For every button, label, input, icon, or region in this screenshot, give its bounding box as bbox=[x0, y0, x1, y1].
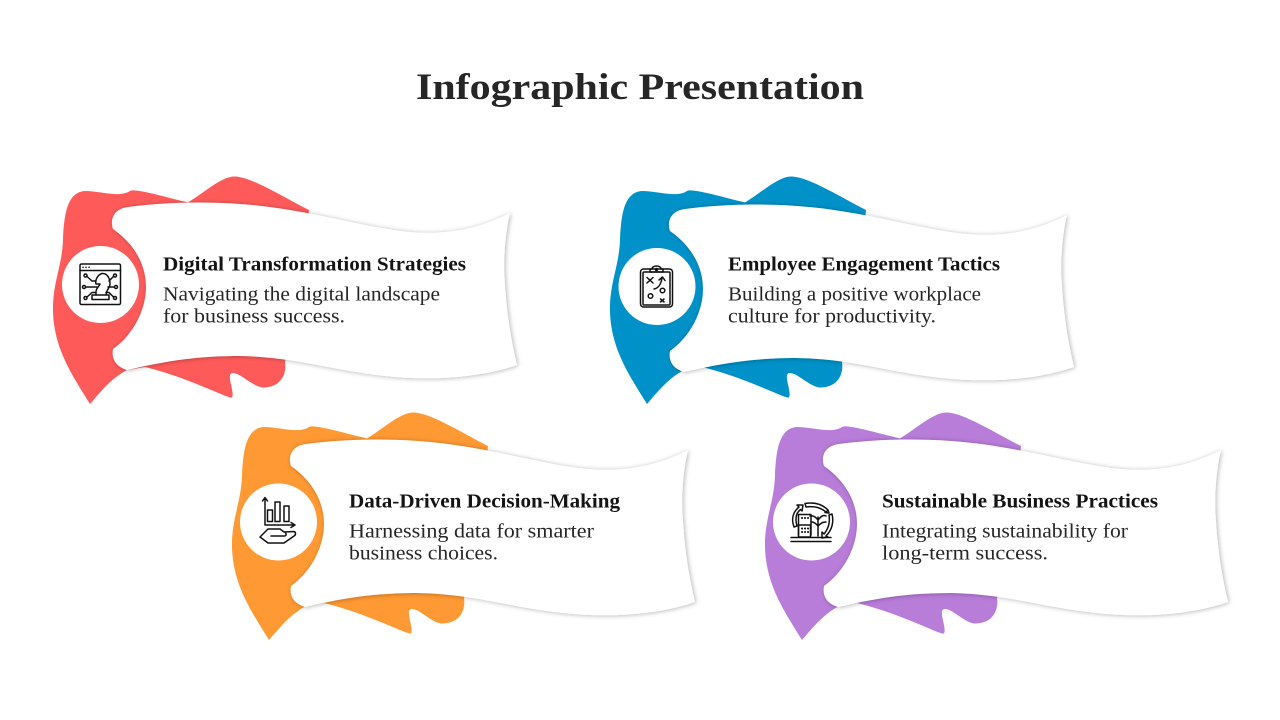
description: culture for productivity. bbox=[728, 306, 936, 328]
purple blob bbox=[765, 412, 1021, 640]
icon: chart over hand bbox=[260, 498, 296, 543]
description: Navigating the digital landscape bbox=[163, 284, 440, 306]
white card bbox=[290, 440, 695, 615]
title: Infographic Presentation bbox=[416, 67, 864, 108]
icon: strategy clipboard bbox=[640, 266, 672, 307]
description: Integrating sustainability for bbox=[882, 520, 1128, 542]
icon: chess knight circuit window bbox=[80, 264, 120, 304]
icon: green buildings cycle bbox=[791, 503, 833, 542]
heading: Digital Transformation Strategies bbox=[163, 254, 466, 276]
icon circle bbox=[618, 248, 696, 325]
heading: Sustainable Business Practices bbox=[882, 490, 1158, 512]
icon circle bbox=[240, 484, 317, 560]
heading: Data-Driven Decision-Making bbox=[349, 490, 620, 512]
blue blob bbox=[610, 176, 866, 404]
description: for business success. bbox=[163, 306, 345, 328]
red blob bbox=[53, 176, 309, 404]
description: Harnessing data for smarter bbox=[349, 520, 594, 542]
panel: digital transformation bbox=[53, 176, 517, 404]
white card bbox=[669, 205, 1074, 380]
panel: data-driven decisions bbox=[232, 412, 695, 640]
orange blob bbox=[232, 412, 488, 640]
description: long-term success. bbox=[882, 542, 1048, 564]
heading: Employee Engagement Tactics bbox=[728, 254, 1000, 276]
icon circle bbox=[62, 246, 139, 323]
icon circle bbox=[773, 484, 850, 560]
white card bbox=[823, 440, 1228, 615]
white card bbox=[112, 203, 517, 378]
panel: employee engagement bbox=[610, 176, 1074, 404]
description: Building a positive workplace bbox=[728, 284, 981, 306]
panel: sustainable practices bbox=[765, 412, 1228, 640]
description: business choices. bbox=[349, 542, 498, 564]
